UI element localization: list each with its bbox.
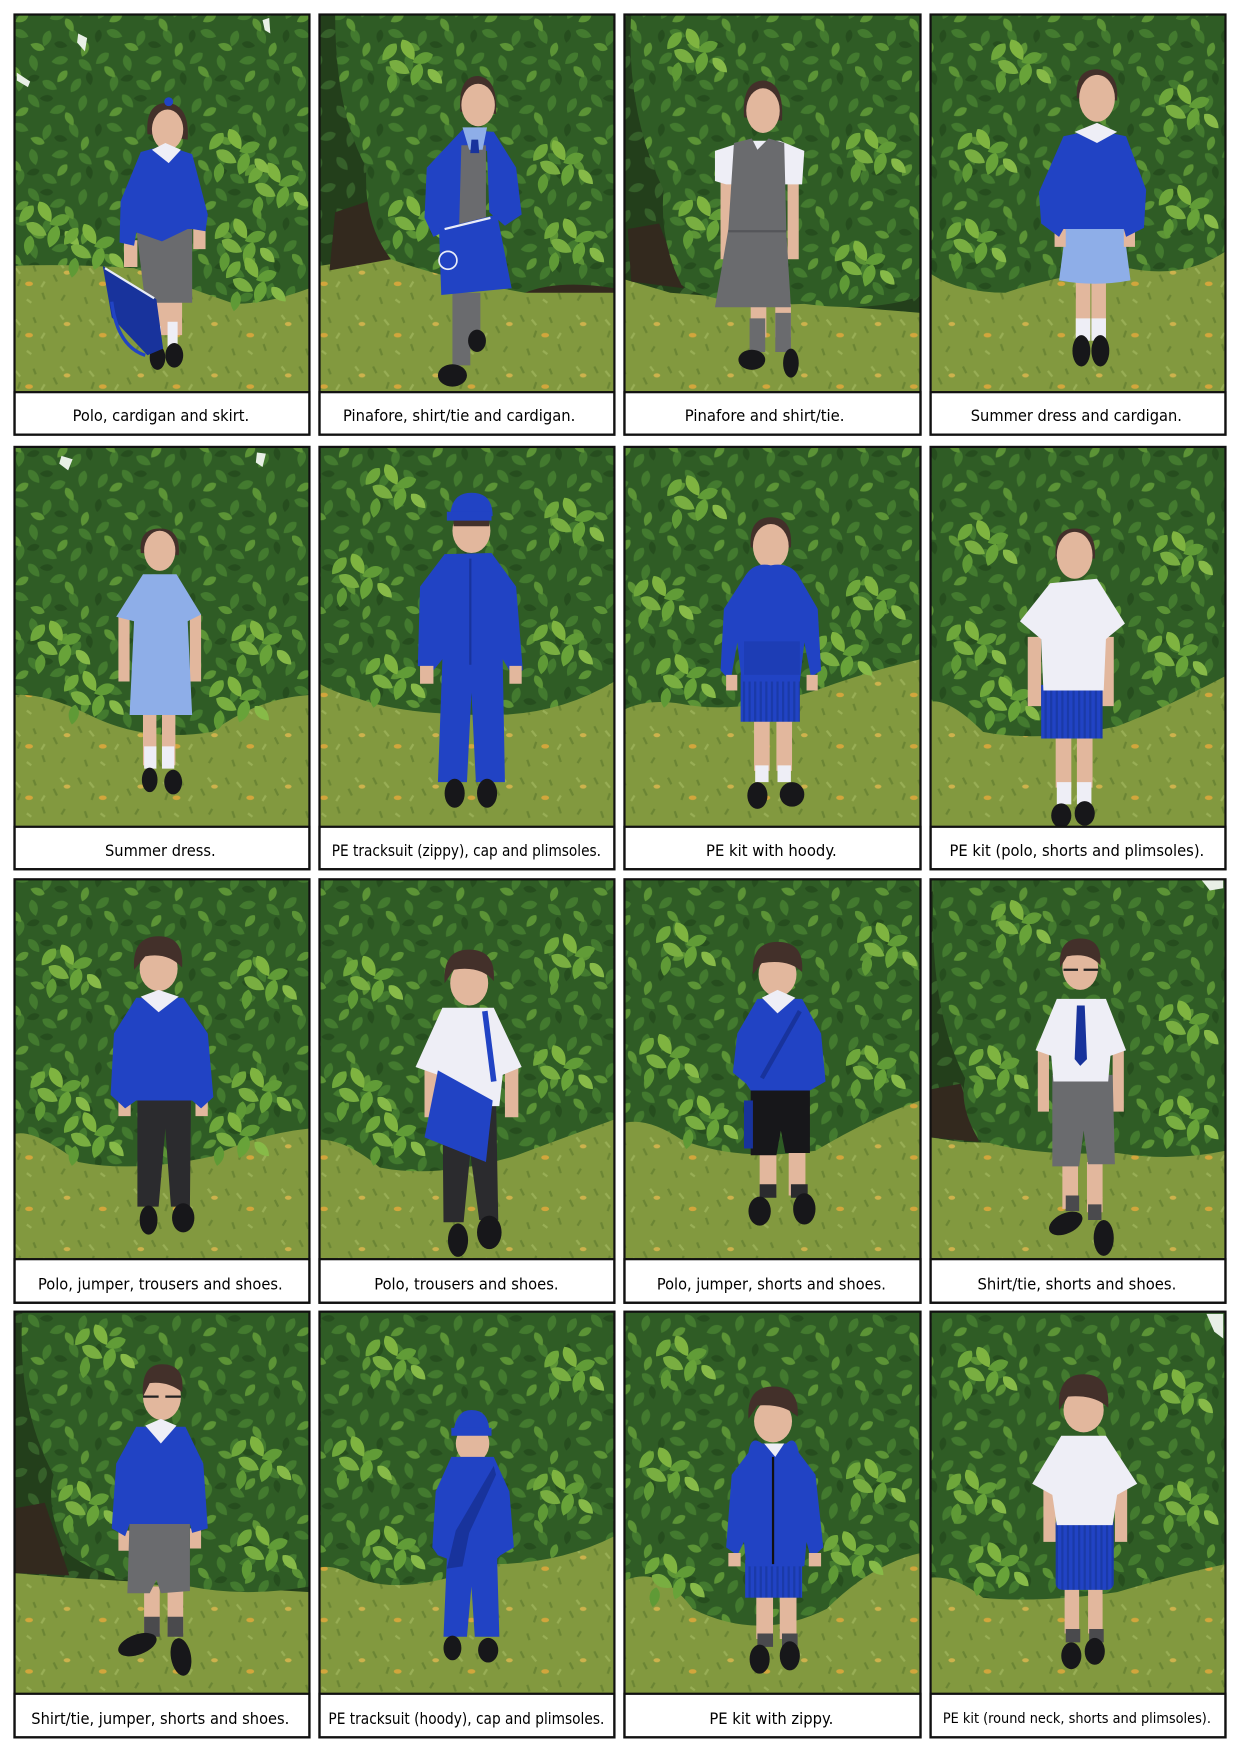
caption: Shirt/tie, shorts and shoes. [977, 1274, 1176, 1293]
child [726, 1387, 823, 1674]
caption: Summer dress. [105, 841, 216, 860]
hedge [624, 1312, 921, 1626]
caption box [15, 1694, 309, 1737]
photo [626, 880, 920, 1258]
hedge [624, 447, 921, 709]
caption box [624, 1694, 921, 1737]
caption: Polo, cardigan and skirt. [73, 406, 249, 425]
child [1039, 69, 1146, 366]
child [733, 942, 826, 1226]
background foliage [931, 879, 1225, 1151]
card: summer dress and cardigan [931, 15, 1225, 435]
photo [626, 448, 920, 826]
background foliage [624, 15, 921, 313]
photo [932, 448, 1224, 826]
card: polo, trousers and shoes [319, 879, 614, 1303]
caption box [624, 392, 921, 435]
caption box [319, 827, 614, 869]
child [425, 76, 522, 387]
hedge [15, 879, 309, 1166]
hedge [931, 1312, 1225, 1600]
child [1032, 1374, 1137, 1669]
caption: Shirt/tie, jumper, shorts and shoes. [31, 1709, 289, 1728]
caption: PE kit (round neck, shorts and plimsoles). [943, 1711, 1211, 1727]
background foliage [15, 1312, 309, 1592]
hedge [22, 1312, 309, 1592]
caption: Polo, trousers and shoes. [374, 1274, 559, 1293]
card: PE kit with zippy [624, 1312, 921, 1737]
hedge [933, 879, 1225, 1157]
photo [932, 880, 1224, 1258]
child [1020, 528, 1125, 828]
caption box [319, 392, 614, 435]
caption box [931, 1694, 1225, 1737]
caption: PE kit with zippy. [709, 1709, 833, 1728]
photo [320, 448, 614, 826]
card: polo, jumper, shorts and shoes [624, 879, 921, 1303]
caption: Summer dress and cardigan. [971, 406, 1182, 425]
caption box [624, 1259, 921, 1303]
caption box [931, 1259, 1225, 1303]
photo [320, 16, 614, 392]
photo [16, 16, 308, 392]
child [721, 517, 821, 809]
photo [626, 16, 920, 392]
photo [16, 880, 308, 1258]
card: pinafore and shirt/tie [624, 15, 921, 435]
hedge [931, 15, 1225, 293]
child [432, 1410, 514, 1663]
card: PE tracksuit (zippy), cap and plimsoles [319, 447, 614, 869]
caption: Polo, jumper, trousers and shoes. [38, 1274, 283, 1293]
caption: Pinafore, shirt/tie and cardigan. [343, 406, 575, 425]
card: polo, jumper, trousers and shoes [15, 879, 309, 1303]
caption box [931, 392, 1225, 435]
card: PE kit (round neck, shorts and plimsoles) [931, 1312, 1225, 1737]
child [103, 97, 208, 370]
child [418, 493, 523, 808]
background foliage [319, 15, 614, 293]
hedge [15, 15, 309, 304]
child [112, 1364, 208, 1677]
photo [932, 1312, 1224, 1693]
card: shirt/tie, jumper, shorts and shoes [15, 1312, 309, 1737]
photo [320, 880, 614, 1258]
caption box [319, 1694, 614, 1737]
photo [932, 16, 1224, 392]
caption: PE kit with hoody. [706, 841, 837, 860]
hedge [319, 447, 614, 715]
child [116, 528, 201, 794]
caption: Pinafore and shirt/tie. [685, 406, 845, 425]
card: PE tracksuit (hoody), cap and plimsoles [319, 1312, 614, 1737]
child [715, 80, 804, 378]
card: polo, cardigan and skirt [15, 15, 312, 435]
hedge [931, 447, 1225, 736]
photo [320, 1312, 614, 1693]
card: pinafore, shirt/tie and cardigan [319, 15, 614, 435]
photo [626, 1312, 920, 1693]
hedge [319, 1312, 614, 1585]
caption box [624, 827, 921, 869]
caption: PE kit (polo, shorts and plimsoles). [950, 841, 1204, 860]
photo [16, 1312, 308, 1693]
card: PE kit with hoody [624, 447, 921, 869]
card: summer dress [15, 447, 309, 869]
hedge [15, 447, 309, 735]
caption box [319, 1259, 614, 1303]
caption box [15, 392, 309, 435]
child [1036, 939, 1126, 1256]
caption box [931, 827, 1225, 869]
photo [16, 448, 308, 826]
caption: Polo, jumper, shorts and shoes. [657, 1274, 886, 1293]
caption: PE tracksuit (hoody), cap and plimsoles. [328, 1709, 604, 1728]
hedge [319, 879, 614, 1171]
card: PE kit (polo, shorts and plimsoles) [931, 447, 1225, 869]
card: shirt/tie, shorts and shoes [931, 879, 1225, 1303]
caption box [15, 1259, 309, 1303]
child [111, 936, 213, 1235]
caption box [15, 827, 309, 869]
child [416, 950, 522, 1257]
hedge [335, 15, 614, 293]
hedge [630, 15, 921, 307]
hedge [624, 879, 921, 1155]
caption: PE tracksuit (zippy), cap and plimsoles. [332, 841, 601, 860]
